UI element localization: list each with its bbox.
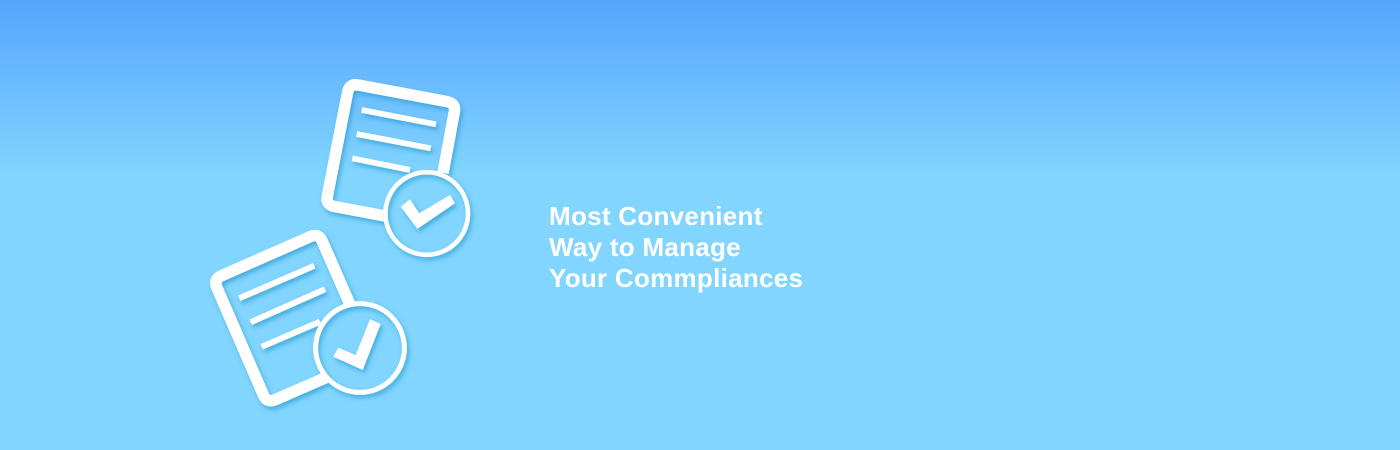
upper document outline xyxy=(327,85,455,216)
lower document text lines xyxy=(239,266,325,347)
headline text xyxy=(549,201,803,293)
icon: upper document with check xyxy=(327,85,468,255)
upper check mark xyxy=(401,195,455,229)
lower document outline xyxy=(216,236,351,401)
upper check badge ring xyxy=(385,172,468,255)
icon: lower document with check xyxy=(216,236,404,401)
headline text: Your Commpliances xyxy=(549,263,803,293)
headline text: Way to Manage xyxy=(549,232,741,262)
upper document text lines xyxy=(352,110,436,170)
lower check badge ring xyxy=(316,304,404,392)
headline text: Most Convenient xyxy=(549,201,763,231)
lower check mark xyxy=(333,319,381,370)
